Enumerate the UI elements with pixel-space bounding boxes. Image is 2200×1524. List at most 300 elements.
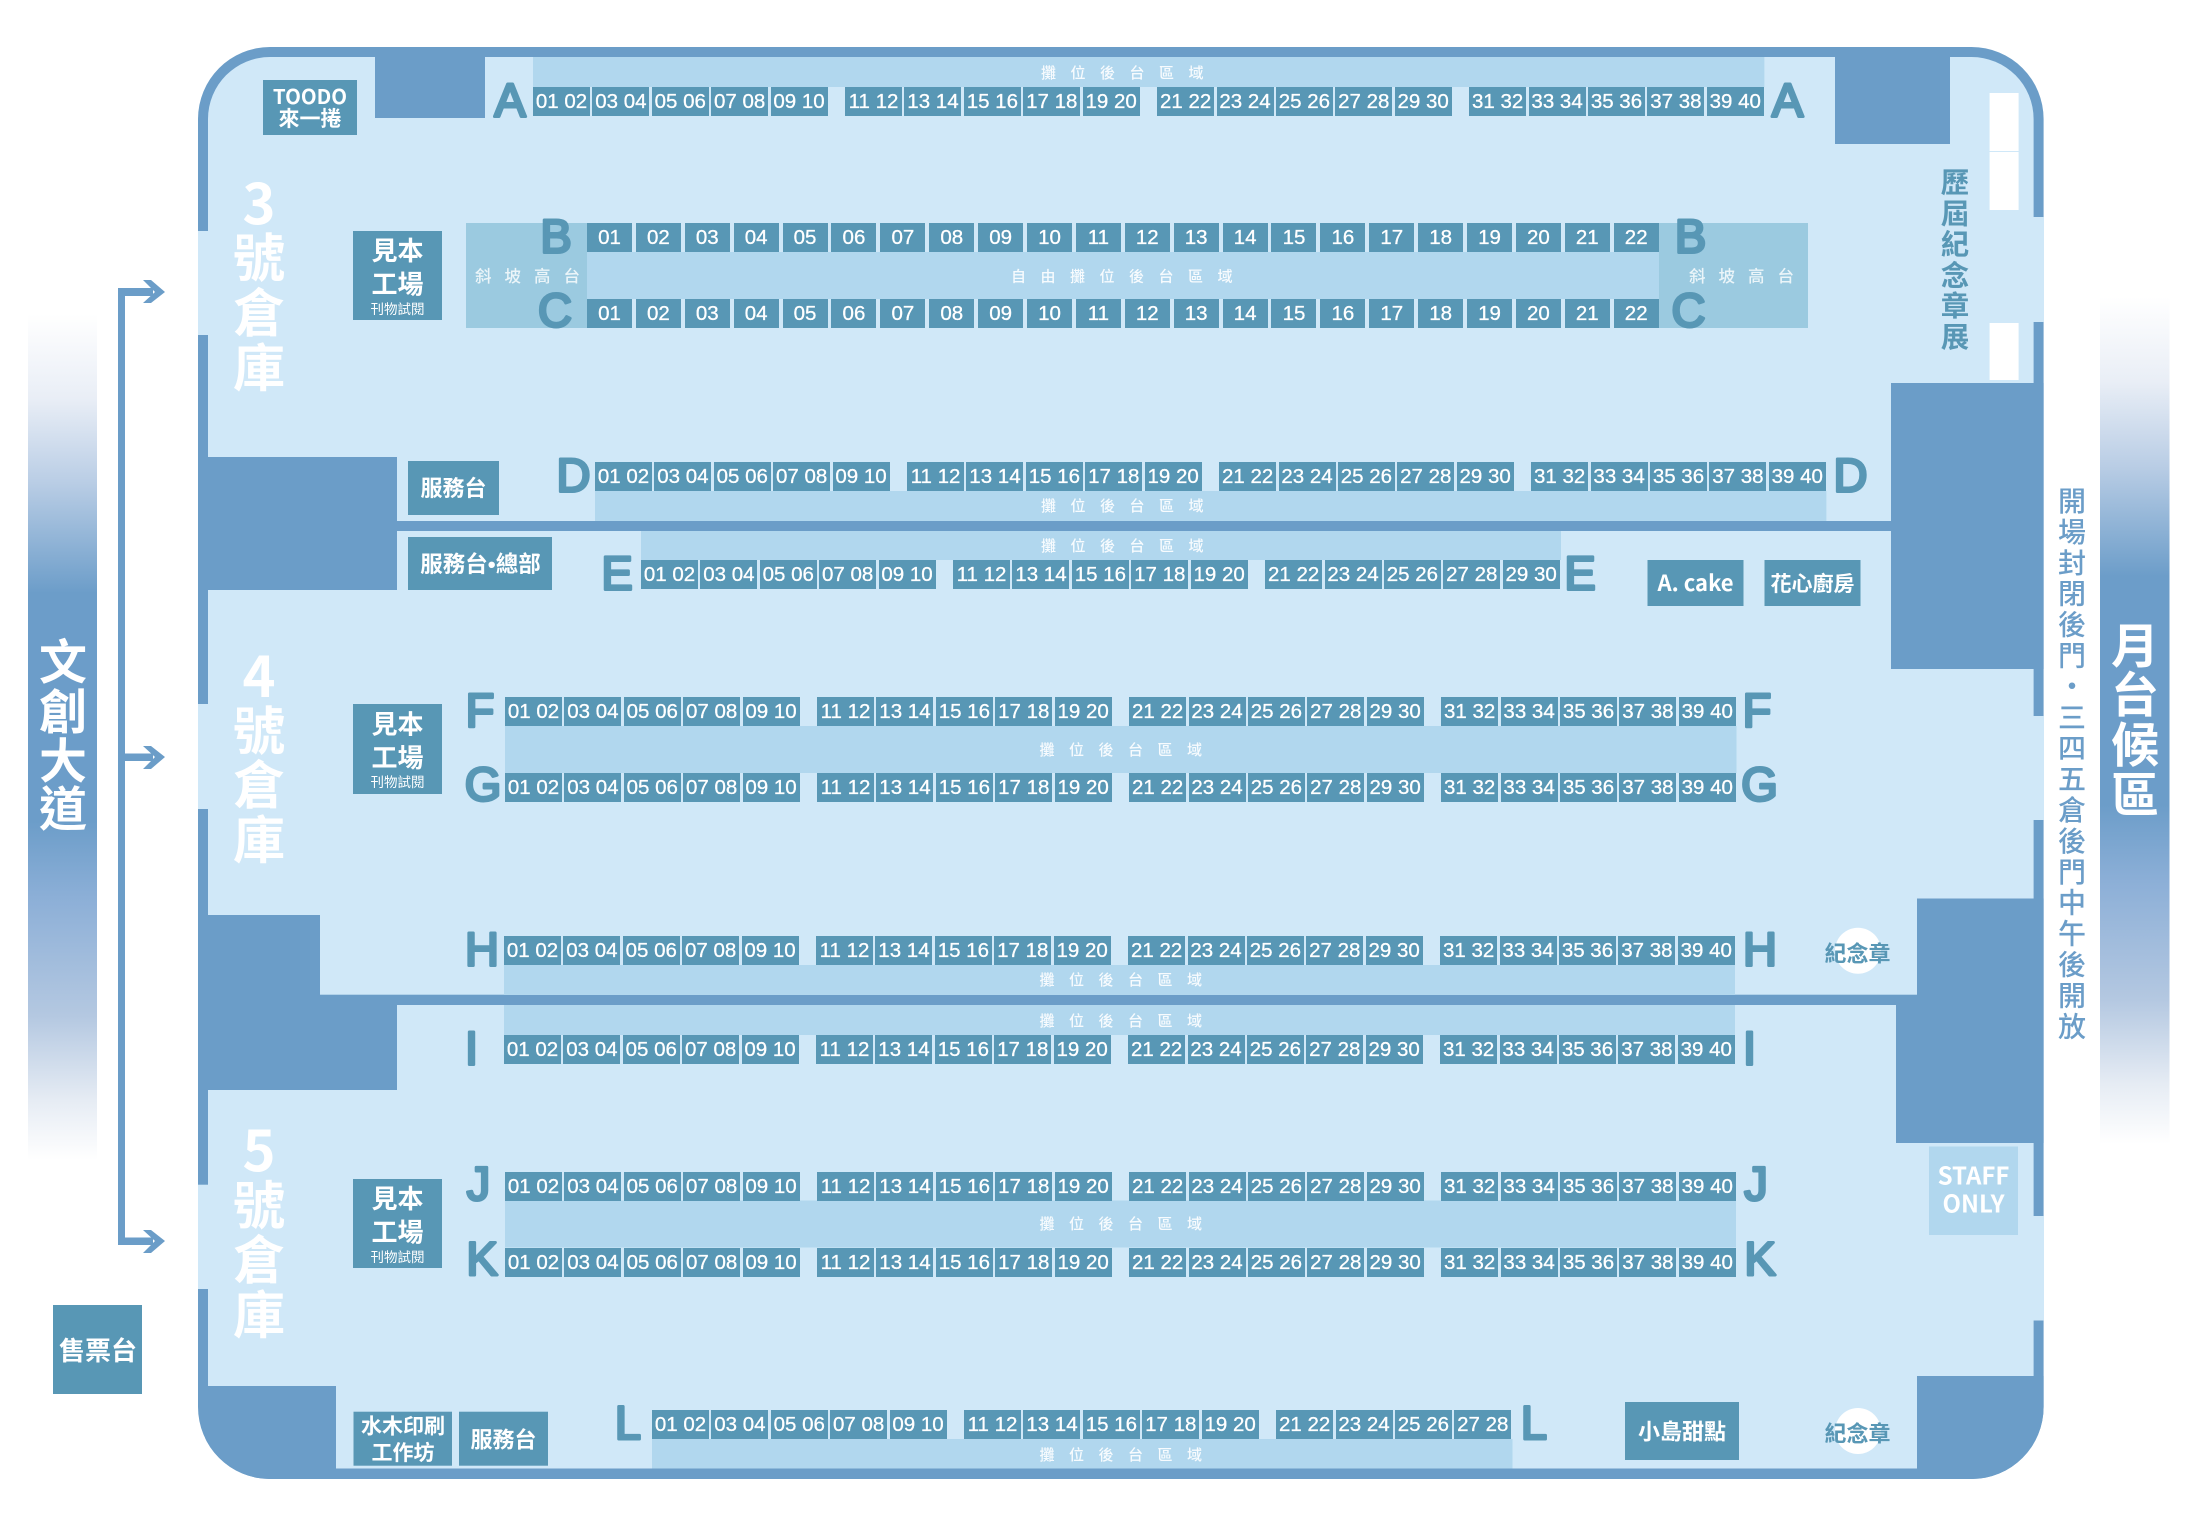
booth row I: 01 02 (507, 1038, 558, 1061)
booth row K: 03 04 (567, 1250, 619, 1274)
row letters: K (466, 1232, 498, 1285)
sample workshop, warehouse 3 (353, 231, 442, 320)
booth row K: 17 18 (998, 1250, 1049, 1274)
aisle A backstage area: 攤位後台區域 (1041, 62, 1218, 83)
booth row G: 25 26 (1251, 776, 1302, 799)
booth row B: 13 (1185, 226, 1208, 249)
booth row C: 05 (794, 302, 816, 325)
booth row D: 33 34 (1593, 465, 1645, 488)
booth row H: 03 04 (566, 939, 618, 962)
booth row D: 13 14 (969, 465, 1021, 488)
booth row C: 09 (989, 302, 1012, 325)
booth row C: 11 (1088, 302, 1109, 325)
booth row E: 03 04 (703, 563, 755, 586)
booth row C: 22 (1625, 302, 1648, 325)
booth row A: 07 08 (714, 90, 765, 113)
booth row G: 31 32 (1444, 776, 1495, 799)
booth row F: 03 04 (567, 700, 619, 723)
aisle BC free backstage area (587, 252, 1659, 299)
booth row G: 29 30 (1370, 776, 1421, 799)
booth row E: 13 14 (1015, 563, 1067, 586)
booth row A: 27 28 (1338, 90, 1389, 113)
row letters: L (615, 1396, 641, 1449)
booth row H: 07 08 (685, 939, 736, 962)
aisle H backstage area: 攤位後台區域 (1040, 969, 1217, 990)
booth row H: 19 20 (1056, 939, 1108, 962)
booth row G: 01 02 (508, 776, 559, 799)
booth row K: 21 22 (1132, 1250, 1183, 1274)
booth row K: 07 08 (686, 1250, 737, 1274)
row letters: A (1772, 74, 1804, 126)
booth row C: 06 (843, 302, 865, 325)
booth row G: 35 36 (1563, 776, 1614, 799)
booth row G: 15 16 (939, 776, 990, 799)
sample workshop, warehouse 3: 刊物試閱 (370, 302, 424, 317)
row letters: F (1743, 684, 1771, 736)
back door opening notice: 放 (2058, 1011, 2086, 1042)
aisle D backstage area: 攤位後台區域 (1041, 495, 1218, 516)
booth row F: 19 20 (1057, 700, 1109, 723)
booth row K: 11 12 (821, 1250, 870, 1274)
booth row C (587, 299, 1659, 328)
booth row G: 11 12 (821, 776, 870, 799)
booth row J: 39 40 (1682, 1174, 1733, 1198)
booth row B: 16 (1331, 226, 1354, 249)
booth row J: 01 02 (508, 1174, 559, 1198)
past badges exhibition label: 展 (1941, 315, 1969, 356)
aisle JK backstage area (505, 1200, 1736, 1248)
booth row B: 21 (1576, 226, 1599, 249)
aisle I backstage area: 攤位後台區域 (1040, 1010, 1217, 1031)
booth row C: 14 (1234, 302, 1256, 325)
booth row I: 33 34 (1502, 1038, 1554, 1061)
booth row G: 17 18 (998, 776, 1049, 799)
booth row H: 27 28 (1309, 939, 1360, 962)
booth row F (505, 697, 1736, 726)
booth row H: 39 40 (1681, 939, 1732, 962)
booth row A: 01 02 (536, 90, 587, 113)
booth row C: 15 (1283, 302, 1305, 325)
booth row B (587, 223, 1659, 252)
booth row H: 37 38 (1621, 939, 1673, 962)
booth row F: 01 02 (508, 700, 559, 723)
aisle L backstage area: 攤位後台區域 (1040, 1444, 1217, 1465)
booth row B: 18 (1429, 226, 1452, 249)
aisle L backstage area (652, 1439, 1512, 1468)
back door opening notice: 後 (2058, 826, 2086, 857)
booth row C: 10 (1038, 302, 1061, 325)
back door opening notice: 封 (2058, 548, 2086, 579)
commemorative badge spot lower (1824, 1408, 1891, 1454)
booth row H: 13 14 (878, 939, 930, 962)
commemorative badge spot upper (1824, 928, 1891, 974)
TOODO booth: 來一捲 (278, 103, 342, 133)
booth row C: 16 (1331, 302, 1354, 325)
back door opening notice: 五 (2058, 764, 2086, 795)
booth row D: 35 36 (1653, 465, 1704, 488)
aisle A backstage area (533, 57, 1764, 87)
booth row L: 11 12 (968, 1413, 1017, 1436)
booth row G: 07 08 (686, 776, 737, 799)
booth row H (504, 936, 1735, 965)
service desk and headquarters (408, 537, 552, 590)
aisle D backstage area (595, 491, 1826, 521)
booth row B: 14 (1234, 226, 1256, 249)
booth row L: 25 26 (1398, 1413, 1449, 1436)
row letters: L (1521, 1396, 1547, 1449)
platform waiting area label: 台 (2111, 656, 2159, 726)
booth row D: 27 28 (1400, 465, 1451, 488)
booth row G: 23 24 (1191, 776, 1243, 799)
Wenchuang avenue label: 創 (39, 673, 87, 743)
row letters: I (465, 1022, 478, 1074)
sample workshop, warehouse 5: 見本 (371, 1179, 424, 1216)
booth row H: 05 06 (626, 939, 677, 962)
TOODO booth: TOODO (273, 80, 347, 110)
booth row D: 31 32 (1534, 465, 1585, 488)
island desserts booth: 小島甜點 (1638, 1414, 1726, 1446)
booth row B: 11 (1088, 226, 1109, 249)
booth row D: 21 22 (1222, 465, 1273, 488)
booth row I: 27 28 (1309, 1038, 1360, 1061)
booth row G: 05 06 (627, 776, 678, 799)
booth row D: 25 26 (1341, 465, 1392, 488)
aisle H backstage area (504, 965, 1735, 995)
back door opening notice: 開 (2058, 486, 2086, 517)
booth row D: 05 06 (717, 465, 768, 488)
back door opening notice: ・ (2058, 671, 2086, 702)
booth row K: 25 26 (1251, 1250, 1302, 1274)
service desk bottom: 服務台 (470, 1422, 537, 1454)
row letters: H (465, 922, 499, 976)
left avenue gradient band (28, 314, 97, 1160)
booth row D (595, 462, 1826, 491)
booth row L: 17 18 (1145, 1413, 1196, 1436)
booth row J: 05 06 (627, 1174, 678, 1198)
booth row J: 11 12 (821, 1174, 870, 1198)
booth row D: 07 08 (776, 465, 827, 488)
booth row B: 12 (1136, 226, 1159, 249)
booth row E: 21 22 (1268, 563, 1319, 586)
booth row B: 06 (843, 226, 865, 249)
past badges exhibition label: 歷 (1941, 161, 1969, 202)
booth row G: 39 40 (1682, 776, 1733, 799)
ramp platform left: 斜坡高台 (475, 263, 593, 287)
sample workshop, warehouse 5: 刊物試閱 (370, 1250, 424, 1265)
booth row A: 21 22 (1160, 90, 1211, 113)
booth row F: 11 12 (821, 700, 870, 723)
booth row J: 13 14 (879, 1174, 931, 1198)
booth row F: 25 26 (1251, 700, 1302, 723)
row letters: E (601, 546, 633, 600)
aisle JK backstage area: 攤位後台區域 (1040, 1213, 1217, 1234)
booth row J: 35 36 (1563, 1174, 1614, 1198)
Wenchuang avenue label: 道 (39, 770, 87, 840)
row letters: D (557, 448, 590, 502)
sample workshop, warehouse 4: 見本 (371, 704, 424, 742)
booth row E: 11 12 (957, 563, 1006, 586)
booth row D: 23 24 (1281, 465, 1333, 488)
booth row K: 23 24 (1191, 1250, 1243, 1274)
aisle E backstage area (641, 531, 1561, 560)
TOODO booth (263, 80, 357, 135)
booth row B: 20 (1527, 226, 1550, 249)
sample workshop, warehouse 4: 工場 (371, 738, 424, 775)
booth row H: 29 30 (1369, 939, 1420, 962)
booth row F: 15 16 (939, 700, 990, 723)
booth row C: 17 (1380, 302, 1403, 325)
booth row G: 19 20 (1057, 776, 1109, 799)
warehouse 5 label: 倉 (233, 1219, 285, 1294)
booth row D: 15 16 (1029, 465, 1080, 488)
woodblock printing workshop (354, 1411, 452, 1467)
booth row A: 37 38 (1650, 90, 1702, 113)
booth row J: 21 22 (1132, 1174, 1183, 1198)
row letters (465, 74, 1867, 1449)
booth row I: 17 18 (997, 1038, 1048, 1061)
sample workshop, warehouse 3: 工場 (371, 264, 424, 302)
booth row E: 27 28 (1446, 563, 1497, 586)
booth row I: 35 36 (1562, 1038, 1613, 1061)
booth row I: 09 10 (744, 1038, 796, 1061)
warehouse 5 label: 5 (242, 1107, 276, 1188)
booth row K: 01 02 (508, 1250, 559, 1274)
booth row I: 31 32 (1443, 1038, 1494, 1061)
booth row G: 09 10 (745, 776, 797, 799)
booth row E: 09 10 (881, 563, 933, 586)
booth row D: 39 40 (1772, 465, 1823, 488)
booth row K (505, 1248, 1736, 1277)
platform waiting area label: 候 (2111, 706, 2159, 776)
warehouse 4 label: 庫 (233, 799, 285, 874)
booth row I: 21 22 (1131, 1038, 1182, 1061)
booth row G: 33 34 (1503, 776, 1555, 799)
row letters: G (465, 758, 501, 810)
service desk: 服務台 (420, 471, 487, 503)
booth row J: 03 04 (567, 1174, 619, 1198)
booth row A: 03 04 (595, 90, 647, 113)
booth row A: 19 20 (1085, 90, 1137, 113)
staff only room (1929, 1146, 2018, 1235)
booth row J: 19 20 (1057, 1174, 1109, 1198)
booth row F: 17 18 (998, 700, 1049, 723)
booth row J: 15 16 (939, 1174, 990, 1198)
booth row A: 13 14 (907, 90, 959, 113)
row letters: J (467, 1157, 490, 1210)
past badges exhibition label: 章 (1941, 284, 1969, 325)
booth row K: 19 20 (1057, 1250, 1109, 1274)
arrows from the avenue into each warehouse (118, 280, 165, 1253)
booth row H: 15 16 (938, 939, 989, 962)
booth row A (533, 87, 1764, 116)
service desk bottom (459, 1412, 548, 1466)
Wenchuang avenue label: 文 (39, 623, 87, 693)
aisle FG backstage area: 攤位後台區域 (1040, 739, 1217, 760)
commemorative badge spot upper: 紀念章 (1824, 936, 1891, 968)
aisle BC free backstage area: 自由攤位後台區域 (1011, 266, 1247, 286)
booth row G: 27 28 (1310, 776, 1361, 799)
woodblock printing workshop: 水木印刷 (361, 1411, 445, 1441)
booth row H: 33 34 (1502, 939, 1554, 962)
booth row B: 02 (647, 226, 670, 249)
booth row L: 23 24 (1338, 1413, 1390, 1436)
row letters: J (1744, 1157, 1768, 1210)
aisle FG backstage area (505, 726, 1736, 773)
booth row D: 19 20 (1147, 465, 1199, 488)
booth row L (652, 1410, 1511, 1439)
booth row H: 01 02 (507, 939, 558, 962)
back door opening notice: 後 (2058, 950, 2086, 980)
sample workshop, warehouse 4: 刊物試閱 (370, 775, 424, 790)
booth row A: 31 32 (1472, 90, 1523, 113)
booth row D: 17 18 (1088, 465, 1139, 488)
booth row C: 07 (891, 302, 914, 325)
booth row C: 13 (1185, 302, 1208, 325)
booth row I: 39 40 (1681, 1038, 1732, 1061)
booth row A: 23 24 (1219, 90, 1271, 113)
booth row B: 09 (989, 226, 1012, 249)
booth row E: 05 06 (763, 563, 814, 586)
booth row A: 33 34 (1531, 90, 1583, 113)
booth row E: 23 24 (1327, 563, 1379, 586)
booth row B: 01 (598, 226, 621, 249)
A. cake booth (1648, 560, 1744, 606)
booth row K: 33 34 (1503, 1250, 1555, 1274)
booth row L: 01 02 (655, 1413, 706, 1436)
row letters: K (1744, 1232, 1776, 1285)
booth row C: 12 (1136, 302, 1159, 325)
commemorative badge spot lower: 紀念章 (1824, 1416, 1891, 1448)
booth row A: 39 40 (1710, 90, 1761, 113)
booth row E: 07 08 (822, 563, 873, 586)
structural blocks and partition walls (205, 50, 2044, 1479)
hall floor (208, 57, 2034, 1468)
ramp platform left (466, 223, 593, 328)
booth row L: 07 08 (833, 1413, 884, 1436)
ticket counter: 售票台 (59, 1331, 137, 1368)
booth row A: 09 10 (773, 90, 825, 113)
booth row L: 09 10 (892, 1413, 944, 1436)
booth row I: 07 08 (685, 1038, 736, 1061)
booth row A: 11 12 (849, 90, 898, 113)
booth row L: 19 20 (1204, 1413, 1256, 1436)
booth row F: 33 34 (1503, 700, 1555, 723)
row letters: B (540, 210, 572, 262)
booth row F: 09 10 (745, 700, 797, 723)
warehouse 3 label: 號 (233, 217, 285, 292)
sample workshop, warehouse 5 (353, 1179, 442, 1268)
booth row E: 17 18 (1134, 563, 1185, 586)
booth row B: 19 (1478, 226, 1501, 249)
booth row H: 11 12 (820, 939, 869, 962)
booth row F: 13 14 (879, 700, 931, 723)
booth row L: 27 28 (1457, 1413, 1508, 1436)
flower heart kitchen booth (1764, 560, 1860, 606)
booth row B: 03 (696, 226, 719, 249)
row letters: C (1672, 284, 1705, 336)
warehouse 5 label: 庫 (233, 1274, 285, 1349)
booth row F: 07 08 (686, 700, 737, 723)
booth row J: 31 32 (1444, 1174, 1495, 1198)
booth row E: 29 30 (1506, 563, 1557, 586)
service desk (408, 461, 499, 515)
booth row C: 03 (696, 302, 719, 325)
row letters: E (1564, 546, 1596, 600)
past badges exhibition label: 紀 (1941, 222, 1969, 263)
booth row F: 23 24 (1191, 700, 1243, 723)
outer wall of the hall (198, 47, 2044, 1479)
booth row K: 35 36 (1563, 1250, 1614, 1274)
warehouse 3 label: 3 (242, 160, 276, 241)
booth row H: 25 26 (1250, 939, 1301, 962)
booth row A: 15 16 (967, 90, 1018, 113)
booth row K: 27 28 (1310, 1250, 1361, 1274)
A. cake booth: A. cake (1656, 566, 1734, 598)
booth row I (504, 1035, 1735, 1064)
row letters: I (1743, 1022, 1756, 1074)
booth row B: 04 (745, 226, 768, 249)
booth row K: 31 32 (1444, 1250, 1495, 1274)
booth row I: 03 04 (566, 1038, 618, 1061)
booth row K: 37 38 (1622, 1250, 1674, 1274)
booth row G: 21 22 (1132, 776, 1183, 799)
booth row J: 37 38 (1622, 1174, 1674, 1198)
booth row L: 13 14 (1026, 1413, 1078, 1436)
booth row J: 33 34 (1503, 1174, 1555, 1198)
booth row J: 25 26 (1251, 1174, 1302, 1198)
back door opening notice: 閉 (2058, 579, 2086, 610)
booth row B: 22 (1625, 226, 1648, 249)
booth row G: 03 04 (567, 776, 619, 799)
booth row F: 31 32 (1444, 700, 1495, 723)
booth row L: 21 22 (1279, 1413, 1330, 1436)
booth row E: 19 20 (1193, 563, 1245, 586)
booth row I: 11 12 (820, 1038, 869, 1061)
back door opening notice: 午 (2058, 919, 2086, 950)
back door opening notice: 場 (2058, 517, 2086, 548)
row letters: G (1741, 758, 1778, 810)
booth row D: 11 12 (911, 465, 960, 488)
booth row I: 23 24 (1190, 1038, 1242, 1061)
booth row I: 05 06 (626, 1038, 677, 1061)
platform waiting area label: 區 (2111, 756, 2159, 826)
booth row A: 25 26 (1279, 90, 1330, 113)
booth row G (505, 773, 1736, 802)
right platform gradient band (2100, 297, 2170, 1144)
booth row I: 29 30 (1369, 1038, 1420, 1061)
flower heart kitchen booth: 花心廚房 (1770, 568, 1854, 598)
booth row K: 29 30 (1370, 1250, 1421, 1274)
warehouse 4 label: 號 (233, 690, 285, 765)
warehouse 5 label: 號 (233, 1164, 285, 1240)
booth row J: 27 28 (1310, 1174, 1361, 1198)
booth row F: 39 40 (1682, 700, 1733, 723)
booth row E: 15 16 (1075, 563, 1126, 586)
white display panels (1990, 93, 2019, 380)
row letters: C (538, 284, 572, 336)
booth row C: 21 (1576, 302, 1599, 325)
booth row A: 05 06 (655, 90, 706, 113)
booth row F: 05 06 (627, 700, 678, 723)
booth row I: 13 14 (878, 1038, 930, 1061)
aisle I backstage area (504, 1005, 1735, 1035)
booth row J: 09 10 (745, 1174, 797, 1198)
booth row A: 29 30 (1398, 90, 1449, 113)
booth row C: 01 (598, 302, 621, 325)
back door opening notice: 倉 (2058, 795, 2086, 826)
booth row F: 27 28 (1310, 700, 1361, 723)
warehouse 4 label: 倉 (233, 744, 285, 819)
